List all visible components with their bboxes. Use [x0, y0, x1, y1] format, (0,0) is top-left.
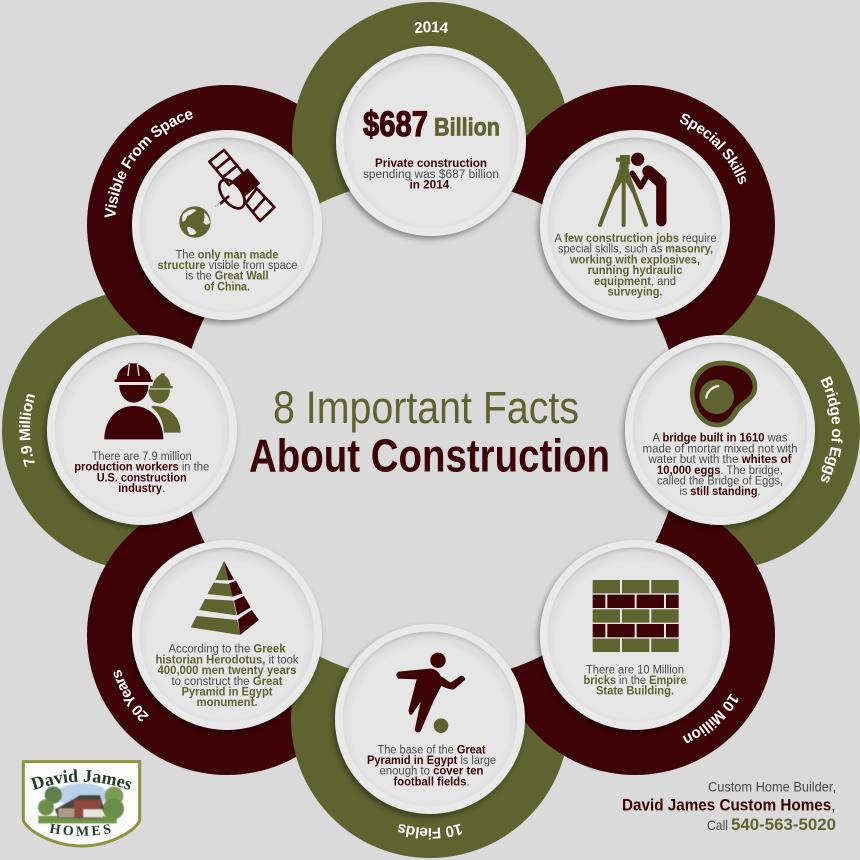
panel: 7.9 Million — [18, 335, 238, 530]
fact text: production workers in the — [74, 462, 209, 474]
fact text: industry. — [118, 483, 165, 495]
disc — [540, 130, 730, 320]
fact text: made of mortar mixed not with — [642, 443, 798, 455]
logo shield — [23, 762, 140, 846]
fact text: A bridge built in 1610 was — [652, 433, 788, 445]
fact text — [74, 451, 209, 495]
fact text: monument. — [196, 697, 258, 709]
fact text: There are 10 Million — [586, 664, 684, 676]
fact text: equipment, and — [594, 276, 676, 288]
fact text: running hydraulic — [588, 265, 683, 277]
panel: Bridge of Eggs — [620, 335, 843, 530]
logo homes: HOMES — [49, 824, 110, 836]
contact block — [622, 779, 836, 834]
fact text: Private construction — [375, 158, 487, 170]
fact text: A few construction jobs require — [554, 233, 716, 245]
fact text: working with explosives, — [569, 254, 700, 266]
disc — [335, 624, 525, 814]
fact text: in 2014. — [410, 180, 452, 192]
fact text: to construct the Great — [172, 676, 283, 688]
icon: satellite and globe — [179, 150, 274, 238]
fact text: of China. — [204, 281, 250, 293]
ring: 20 Years — [87, 495, 367, 775]
label: 2014: 2014 — [414, 21, 448, 34]
panel: 2014 — [332, 21, 526, 242]
ring: Visible From Space — [87, 85, 367, 365]
fact text: is still standing. — [680, 486, 760, 498]
big number: Billion — [434, 114, 500, 142]
icon: construction workers — [104, 363, 181, 439]
label: 10 Million: 10 Million — [682, 694, 738, 743]
fact text — [584, 664, 686, 698]
disc — [625, 335, 815, 525]
fact text: special skills, such as masonry, — [558, 244, 713, 256]
icon: fried egg — [690, 361, 757, 427]
label: 7.9 Million: 7.9 Million — [18, 394, 36, 467]
icon: pyramid — [191, 561, 259, 635]
label: Bridge of Eggs: Bridge of Eggs — [820, 376, 843, 483]
ring: Bridge of Eggs — [580, 290, 860, 570]
fact text: spending was $687 billion — [363, 169, 499, 181]
fact text: football fields. — [394, 776, 470, 788]
panel: Visible From Space — [104, 111, 324, 326]
fact text — [363, 158, 499, 192]
disc — [132, 130, 322, 320]
fact text: surveying. — [608, 286, 662, 298]
label: Visible From Space: Visible From Space — [104, 111, 193, 218]
fact text: State Building. — [596, 686, 674, 698]
disc — [336, 46, 526, 236]
disc — [47, 335, 237, 525]
big number: $687 — [363, 105, 428, 144]
contact line 1: Custom Home Builder, — [708, 779, 836, 795]
title line 1: 8 Important Facts — [273, 382, 579, 433]
label: 20 Years: 20 Years — [114, 670, 149, 722]
icon: football player — [396, 653, 465, 733]
fact text: According to the Greek — [168, 644, 286, 656]
fact text: 400,000 men twenty years — [158, 665, 296, 677]
fact text — [642, 433, 798, 498]
icon: brick wall — [593, 580, 679, 652]
fact text — [158, 249, 298, 293]
fact text: called the Bridge of Eggs, — [657, 476, 783, 488]
disc — [540, 540, 730, 730]
fact text — [554, 233, 716, 298]
fact text — [367, 744, 496, 788]
fact text: structure visible from space — [158, 260, 298, 272]
panel: Special Skills — [534, 114, 746, 326]
panel: 10 Million — [534, 540, 738, 743]
logo house illustration — [38, 783, 124, 823]
ring: 2014 — [292, 2, 570, 280]
title — [249, 382, 610, 482]
disc — [132, 540, 322, 730]
ring: Special Skills — [495, 85, 775, 365]
fact text: The only man made — [176, 249, 278, 261]
title line 2: About Construction — [249, 430, 610, 482]
central grey disc — [178, 178, 682, 682]
fact text: enough to cover ten — [380, 766, 484, 778]
fact text: 10,000 eggs. The bridge, — [657, 465, 783, 477]
fact text: U.S. construction — [97, 472, 187, 484]
label: Special Skills: Special Skills — [680, 114, 746, 184]
ring: 10 Million — [495, 495, 775, 775]
ring: 10 Fields — [291, 580, 569, 858]
fact text: Pyramid in Egypt is large — [367, 755, 496, 767]
big number — [363, 105, 500, 144]
fact text: historian Herodotus, it took — [156, 654, 299, 666]
fact text: There are 7.9 million — [92, 451, 192, 463]
logo: David James Homes — [22, 760, 142, 848]
logo name: David James — [30, 769, 132, 790]
contact line 2: David James Custom Homes, — [622, 797, 836, 815]
contact line 3: Call — [707, 817, 728, 833]
fact text: is the Great Wall — [186, 271, 268, 283]
fact text: The base of the Great — [378, 744, 486, 756]
panel: 10 Fields — [331, 624, 525, 840]
ring: 7.9 Million — [2, 290, 282, 570]
contact line 3: 540-563-5020 — [731, 815, 836, 834]
panel: 20 Years — [114, 540, 324, 734]
fact text — [156, 644, 299, 709]
fact text: water but with the whites of — [648, 454, 792, 466]
fact text: bricks in the Empire — [584, 675, 686, 687]
fact text: Pyramid in Egypt — [182, 686, 273, 698]
label: 10 Fields: 10 Fields — [398, 824, 462, 840]
icon: surveyor with tripod — [600, 153, 661, 225]
